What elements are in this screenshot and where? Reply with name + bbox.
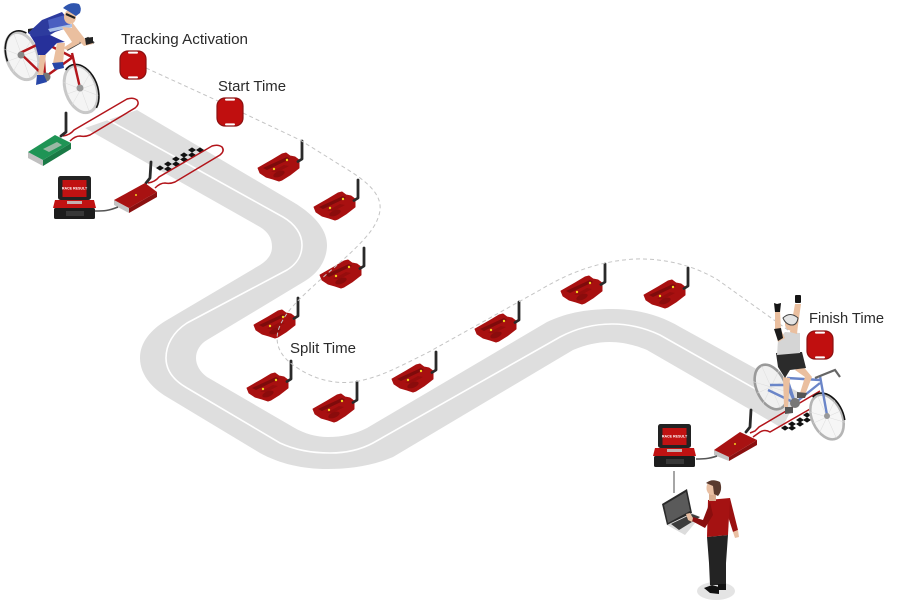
loop antenna: start [148, 145, 223, 188]
finish cable [696, 456, 717, 459]
cyclist: blue rider [0, 3, 105, 117]
mat 1 [258, 141, 302, 181]
mat 4 [254, 298, 298, 338]
red finish box [714, 410, 757, 461]
start checker flag [156, 147, 204, 172]
start cable [95, 207, 118, 211]
label: split time: Split Time [290, 341, 356, 357]
loop antenna: finish [750, 391, 824, 437]
red start box [114, 162, 157, 213]
case to laptop link [673, 471, 675, 493]
mat 2 [314, 180, 358, 220]
tag: start time [217, 98, 243, 126]
loop antenna: activation [63, 98, 138, 141]
laptop [662, 489, 700, 535]
finish checker flag [781, 407, 825, 431]
mats: split time decoders [247, 141, 688, 422]
mat 8 [475, 302, 519, 342]
green activation box [28, 113, 71, 166]
dashed timing route [146, 68, 802, 382]
road [85, 110, 800, 469]
cyclist: winning rider [748, 295, 852, 445]
label: start time: Start Time [218, 79, 286, 95]
start timing case [53, 176, 96, 219]
tag: tracking activation [120, 51, 146, 79]
mat 10 [644, 268, 688, 308]
mat 7 [392, 352, 436, 392]
tag: finish time [807, 331, 833, 359]
operator [686, 480, 739, 600]
finish timing case [653, 424, 696, 467]
mat 6 [313, 382, 357, 422]
mat 3 [320, 248, 364, 288]
label: finish time: Finish Time [809, 311, 884, 327]
mat 9 [561, 264, 605, 304]
mat 5 [247, 361, 291, 401]
label: tracking activation: Tracking Activation [121, 32, 248, 48]
